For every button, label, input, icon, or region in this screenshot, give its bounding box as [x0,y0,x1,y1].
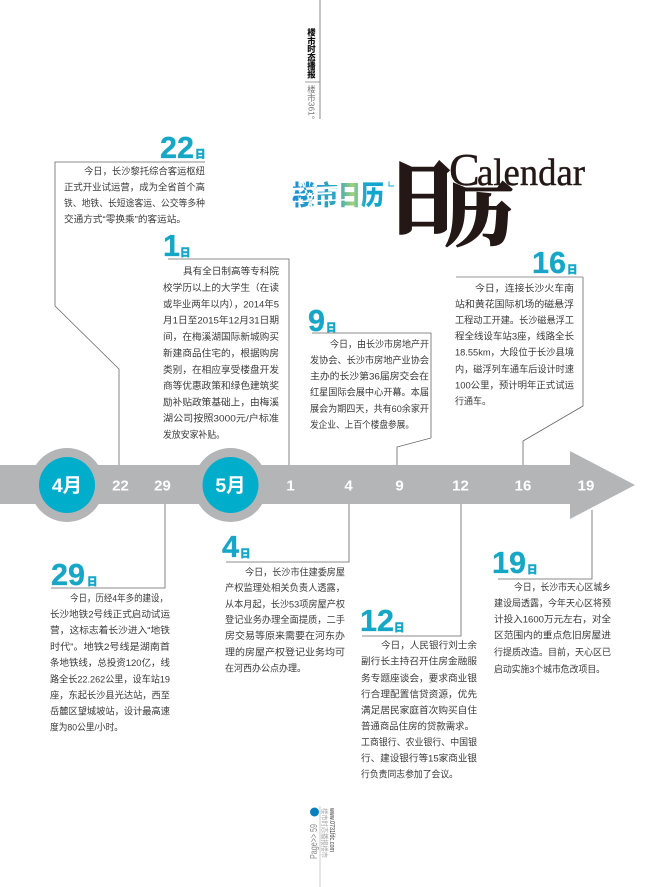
panel: 22日 [55,131,206,465]
body text: 行负责同志参加了会议。 [361,768,458,780]
connector [55,162,205,465]
body text: 湖公司按照3000元/户标准 [163,412,279,424]
body text: 正式开业试运营，成为全省首个高 [64,182,205,192]
body text: 行通车。 [455,396,491,406]
month marker: April: 4月 [52,475,82,497]
panel: 4日 [222,504,349,674]
icon: page dot [310,808,319,816]
body text [225,566,346,674]
body text: 程全线设车站3座，线路全长 [455,330,575,342]
body text: 行、建设银行等15家商业银 [361,752,478,764]
date 16: 16 [532,246,566,280]
body text: 具有全日制高等专科院 [183,266,280,276]
body text: 路全长22.262公里，设车站19 [50,674,170,684]
title glyph: 日: 日 [388,137,456,248]
timeline day labels: 16 [515,478,531,494]
body text: 普通商品住房的贷款需求。 [361,720,474,732]
title: calendar [290,137,585,260]
body text: 新建商品住宅的，根据购房 [163,348,279,358]
panel: 12日 [360,504,478,780]
body text: 发企业、上百个楼盘参展。 [310,419,414,430]
body text: 条地铁线，总投资120亿，线 [50,657,171,668]
body text: 展会为期四天，共有60余家开 [310,403,429,414]
body text: 长沙地铁2号线正式启动试运 [50,608,171,620]
body text: 在河西办公点办理。 [225,662,306,674]
date 29: 29 [51,558,85,592]
date 1 [163,229,190,263]
body text: 商等优惠政策和绿色建筑奖 [163,380,279,391]
timeline day labels: 9 [395,478,404,494]
body text: 100公里，预计明年正式试运 [455,380,575,390]
panel: 9日 [308,304,431,465]
date 12: 日 [394,622,404,634]
body text: 房交易等原来需要在河东办 [225,630,345,641]
date 1: 1 [163,229,180,263]
panel: 29日 [50,504,171,732]
title word: Calendar [449,144,585,195]
body text: 理的房屋产权登记业务均可 [225,646,345,658]
connector [226,504,349,562]
timeline day labels: 12 [452,478,469,494]
body text: 发放安家补贴。 [163,429,225,440]
footer website: www.0731fdc.com [328,807,335,852]
timeline day labels: 19 [578,478,594,494]
body text: 务专题座谈会，要求商业银 [361,672,478,684]
body text: 座，东起长沙县光达站，西至 [50,690,170,700]
month marker: May [194,448,268,522]
date 22: 日 [195,148,206,160]
body text: 今日，长沙市天心区城乡 [514,582,611,592]
body text: 行合理配置信贷资源，优先 [361,688,477,700]
body text: 计投入1600万元左右，对全 [494,614,612,624]
body text: 励补贴政策基础上，由梅溪 [163,396,280,408]
date 4: 日 [240,548,250,560]
body text [494,582,612,674]
body text: 今日，历经4年多的建设， [70,592,168,604]
body text: 今日，人民银行刘士余 [381,640,478,650]
body text: 红星国际会展中心开幕。本届 [310,386,429,398]
body text: 发协会、长沙市房地产业协会 [310,354,430,366]
date 1: 日 [180,247,190,259]
connector [523,277,583,465]
body text [163,266,280,440]
body text: 产权监理处相关负责人透露， [225,582,345,593]
connector [51,504,165,588]
date 9: 9 [308,304,325,338]
date 9 [308,304,336,338]
date 16: 日 [567,264,578,276]
body text: 今日，长沙黎托综合客运枢纽 [84,166,205,176]
section header [305,0,320,119]
date 4 [222,530,250,564]
date 29: 日 [87,576,98,588]
body text [310,338,430,430]
body text: 站和黄花国际机场的磁悬浮 [455,298,574,310]
body text: 从本月起，长沙53项房屋产权 [225,598,346,610]
body text: 区范围内的重点危旧房屋进 [494,630,612,640]
timeline day labels: 29 [154,478,171,494]
timeline day labels: 4 [344,478,353,494]
date 12: 12 [360,604,394,638]
timeline day labels [112,478,594,494]
body text: 工商银行、农业银行、中国银 [361,736,478,748]
section header: 楼市361° [306,84,316,119]
body text: 18.55km，大段位于长沙县境 [455,346,574,358]
body text: 间，在梅溪湖国际新城购买 [163,331,279,342]
connector [362,504,461,636]
page footer [309,806,335,887]
body text: 岳麓区望城坡站，设计最高速 [50,706,170,716]
connector [312,333,431,465]
body text: 交通方式“零换乘”的客运站。 [64,214,186,224]
body text: 或毕业两年以内），2014年5 [163,298,279,310]
title glyph: 历: 历 [445,163,513,260]
page number: Page>> 59 [309,824,320,859]
body text: 建设局透露，今年天心区将预 [494,598,611,608]
body text: 度为80公里/小时。 [50,722,123,732]
body text: 满足居民家庭首次购买自住 [361,704,478,716]
body text: 工程动工开建。长沙磁悬浮工 [455,314,574,326]
body text: 时代”。地铁2号线是湖南首 [50,641,170,652]
panel: 19日 [492,510,612,674]
date 19: 日 [527,564,538,576]
body text: 主办的长沙第36届房交会在 [310,370,429,382]
body text: 今日，长沙市住建委房屋 [245,566,345,578]
panel: 16日 [455,246,583,465]
section header: 楼市时态播报 [306,27,318,79]
body text [455,282,575,406]
body text [361,640,478,780]
body text: 行提质改造。目前，天心区已 [494,646,611,658]
title word: Calendar: C [449,144,480,195]
date 9: 日 [326,322,336,334]
connector [498,510,592,579]
timeline day labels: 22 [112,478,129,494]
footer slogan: 楼市时态播报楼市 [319,808,330,858]
title logo: 楼市日历: 楼市日历 [292,174,384,213]
date 4: 4 [222,530,239,564]
body text: 营，这标志着长沙进入“地铁 [50,624,171,636]
connector [168,259,289,465]
title word: Calendar: alendar [477,152,585,194]
date 19: 19 [492,546,526,580]
body text: 今日，由长沙市房地产开 [330,338,429,350]
body text [64,166,205,224]
body text: 登记业务办理全面提质，二手 [225,614,345,625]
body text: 月1日至2015年12月31日期 [163,314,279,326]
body text: 副行长主持召开住房金融服 [361,656,478,666]
body text: 今日，连接长沙火车南 [475,282,574,294]
body text: 类别，在相应享受楼盘开发 [163,364,280,375]
body text: 铁、地铁、长短途客运、公交等多种 [64,198,205,208]
timeline day labels: 1 [286,478,295,494]
month marker: April [30,448,104,522]
body text: 启动实施3个城市危改项目。 [494,664,605,674]
body text: 校学历以上的大学生（在读 [163,282,279,293]
date 22: 22 [160,131,194,165]
timeline arrow [0,448,635,522]
panel: 1日 [163,229,289,465]
month marker: May: 5月 [215,475,246,497]
body text [50,592,171,732]
body text: 内，磁浮列车通车后设计时速 [455,364,574,374]
